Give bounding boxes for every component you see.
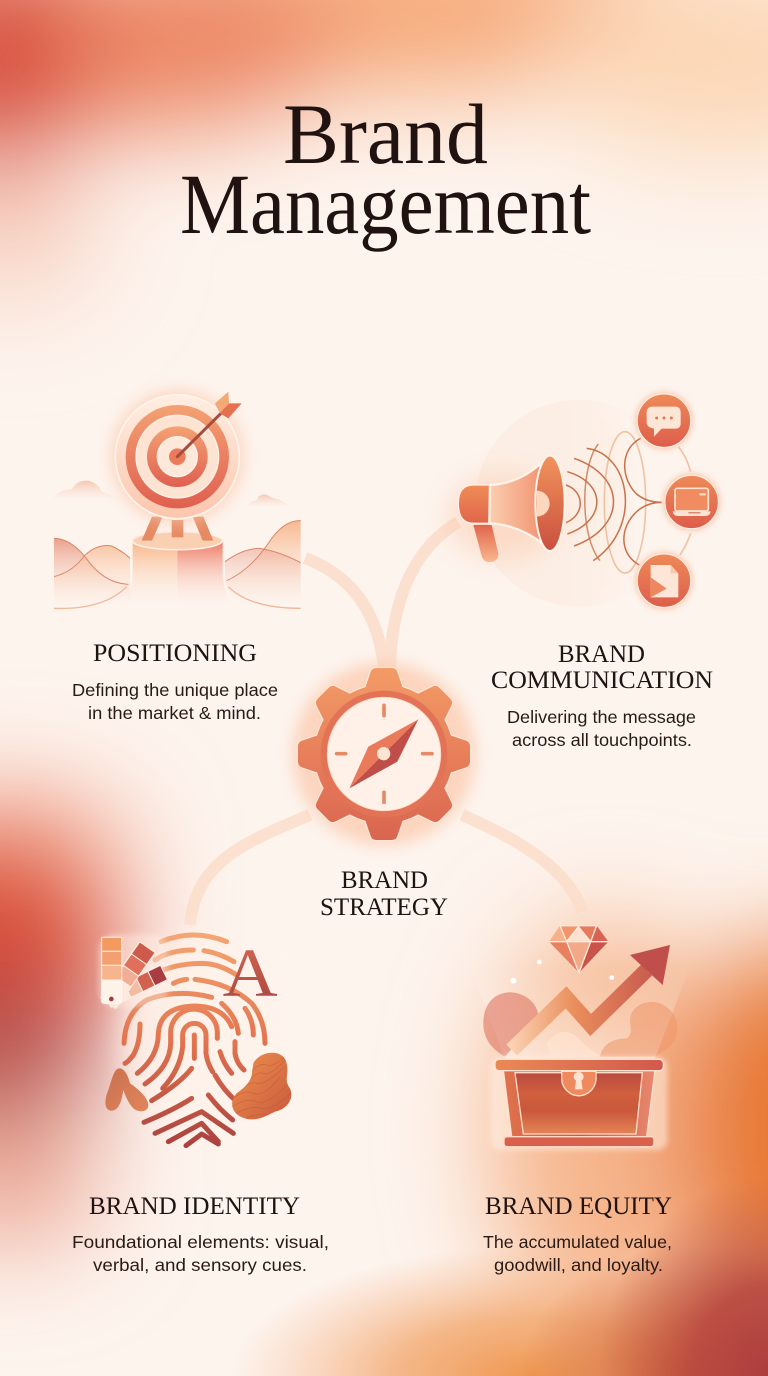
label: brand strategy: BRAND (341, 867, 428, 894)
label: brand equity: goodwill, and loyalty. (494, 1255, 663, 1275)
smoke clouds (483, 992, 677, 1057)
label: positioning: in the market & mind. (88, 703, 261, 723)
icon: positioning target on pedestal (53, 390, 301, 608)
label: brand equity (483, 1193, 672, 1275)
letter A: A (223, 934, 278, 1010)
label: positioning: Defining the unique place (72, 680, 278, 700)
pedestal (117, 532, 238, 608)
title: Brand (283, 86, 488, 182)
target (111, 390, 244, 523)
hills (54, 521, 301, 608)
clouds (53, 481, 288, 506)
sound rings (475, 400, 682, 607)
label: brand identity: verbal, and sensory cues. (93, 1255, 307, 1275)
icon: compass gear (286, 656, 482, 852)
megaphone (447, 456, 565, 562)
icon: treasure chest and growth (470, 926, 690, 1150)
colour swatch fan (98, 934, 168, 1010)
rising arrow (512, 945, 670, 1050)
label: brand equity: The accumulated value, (483, 1232, 672, 1252)
title (180, 86, 591, 252)
icon: fingerprint identity (98, 933, 295, 1146)
label: brand identity: BRAND IDENTITY (89, 1193, 300, 1220)
channel badges (635, 391, 721, 610)
label: brand communication (491, 641, 713, 750)
needle (349, 719, 418, 788)
arrow in target (177, 392, 242, 457)
title: Management (180, 156, 591, 252)
icon: megaphone with channels (447, 391, 721, 610)
label: positioning: POSITIONING (93, 640, 257, 667)
connector paths (190, 522, 582, 925)
sparkles (510, 960, 614, 984)
label: brand communication: COMMUNICATION (491, 667, 713, 694)
diamond (549, 926, 608, 973)
label: brand strategy: STRATEGY (320, 894, 448, 921)
label: positioning (72, 640, 278, 723)
chest (491, 1057, 667, 1150)
tripod (142, 517, 213, 541)
label: brand equity: BRAND EQUITY (485, 1193, 672, 1220)
gear body (298, 668, 470, 840)
light beams (470, 967, 690, 1058)
label: brand strategy (320, 867, 448, 921)
label: brand identity (72, 1193, 329, 1275)
compass ring (321, 691, 447, 817)
texture blobs (105, 1052, 295, 1122)
label: brand identity: Foundational elements: visual, (72, 1232, 329, 1252)
label: brand communication: Delivering the message (507, 707, 696, 727)
label: brand communication: BRAND (558, 641, 645, 668)
fingerprint ridges (124, 935, 265, 1146)
sound waves (566, 432, 691, 573)
ticks (337, 705, 432, 802)
label: brand communication: across all touchpoints. (512, 730, 692, 750)
